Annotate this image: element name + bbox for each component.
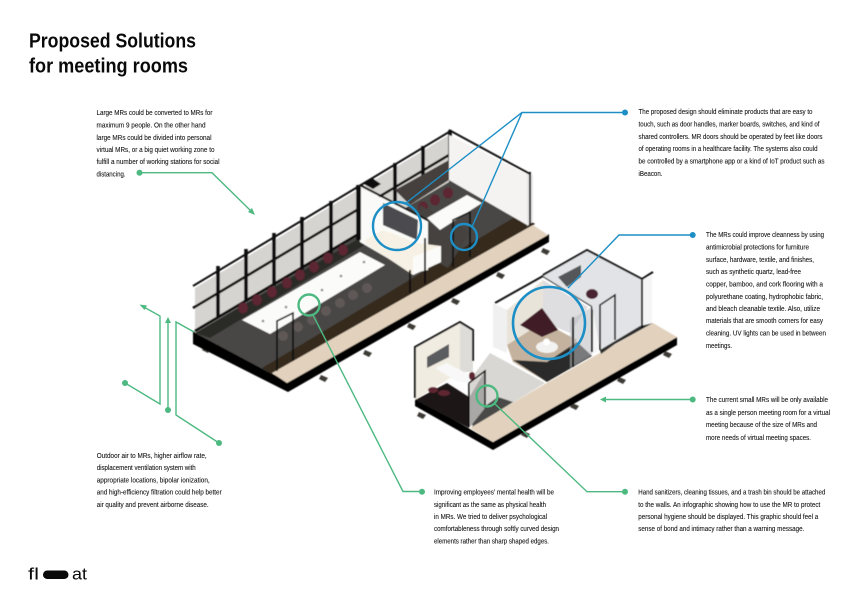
callout: touchless products text: touch, such as door handles, marker boards, switches, and kind of xyxy=(638,122,820,128)
callout: touchless products text: be controlled by a smartphone app or a kind of IoT product such as xyxy=(638,159,825,166)
logo: float: fl xyxy=(28,564,39,584)
callout leader: hygiene xyxy=(476,386,628,495)
title xyxy=(29,30,196,78)
callout: large rooms conversion text: fulfill a number of working stations for social xyxy=(96,159,220,166)
callout: air quality text: and high-efficiency filtration could help better xyxy=(97,490,222,496)
callout: air quality text: air quality and prevent airborne disease. xyxy=(97,502,209,509)
callout: large rooms conversion text: Large MRs could be converted to MRs for xyxy=(96,110,213,117)
callout: single person rooms text: more needs of virtual meeting spaces. xyxy=(706,435,811,442)
callout: cleanness text: copper, bamboo, and cork flooring with a xyxy=(706,282,823,288)
callout: touchless products text: iBeacon. xyxy=(638,171,663,178)
callout: cleanness text xyxy=(706,232,826,350)
callout leader: touchless products xyxy=(373,110,628,250)
left room xyxy=(415,322,460,400)
callout: large rooms conversion text: distancing. xyxy=(96,171,126,178)
callout: touchless products text xyxy=(638,109,825,178)
callout: cleanness text: The MRs could improve cleanness by using xyxy=(706,232,824,239)
callout: single person rooms text: meeting because of the size of MRs and xyxy=(706,422,817,429)
callout: air quality text: Outdoor air to MRs, higher airflow rate, xyxy=(97,453,207,460)
callout: cleanness text: materials that are smooth corners for easy xyxy=(706,318,823,325)
callout: air quality text xyxy=(97,453,222,509)
callout: mental health text xyxy=(434,490,559,546)
callout: touchless products text: of operating rooms in a healthcare facility. The systems also could xyxy=(638,146,818,153)
logo: float xyxy=(28,564,87,584)
callout: cleanness text: meetings. xyxy=(706,343,732,350)
callout: hygiene text xyxy=(638,490,825,533)
callout: cleanness text: antimicrobial protections for furniture xyxy=(706,244,809,252)
title: for meeting rooms xyxy=(29,56,188,78)
callout leader: mental health xyxy=(298,294,425,495)
callout: mental health text: comfortableness through softly curved design xyxy=(434,526,559,533)
callout: large rooms conversion text: virtual MRs, or a big quiet working zone to xyxy=(96,147,215,154)
callout: single person rooms text xyxy=(706,397,830,442)
callout: large rooms conversion text xyxy=(96,110,220,178)
callout: touchless products text: shared controllers. MR doors should be operated by feet like doors xyxy=(638,134,823,141)
callout: mental health text: elements rather than sharp shaped edges. xyxy=(434,538,549,546)
callout leader: cleanness xyxy=(513,232,696,359)
logo: float: at xyxy=(72,564,87,584)
callout: cleanness text: such as synthetic quartz, lead-free xyxy=(706,269,801,276)
arrows: ventilation airflow xyxy=(122,304,222,446)
callout: mental health text: significant as the same as physical health xyxy=(434,502,546,509)
callout: touchless products text: The proposed design should eliminate products that are easy to xyxy=(638,109,813,116)
illustration: small meeting rooms floor xyxy=(415,250,677,450)
callout: cleanness text: polyurethane coating, hydrophobic fabric, xyxy=(706,294,823,301)
right room xyxy=(543,250,642,350)
callout: large rooms conversion text: maximum 9 people. On the other hand xyxy=(96,122,206,130)
callout: mental health text: Improving employees’ mental health will be xyxy=(434,490,554,496)
callout: mental health text: in MRs. We tried to deliver psychological xyxy=(434,514,547,521)
callout: hygiene text: Hand sanitizers, cleaning tissues, and a trash bin should be attached xyxy=(638,490,825,496)
arrow: large rooms leader xyxy=(136,170,255,215)
callout: hygiene text: to the walls. An infographic showing how to use the MR to protect xyxy=(638,502,820,509)
callout: air quality text: appropriate locations, bipolar ionization, xyxy=(97,478,210,484)
callout: cleanness text: and bleach cleanable textile. Also, utilize xyxy=(706,306,820,313)
arrow: single person rooms leader xyxy=(600,396,696,402)
title: Proposed Solutions xyxy=(29,30,196,52)
callout: large rooms conversion text: large MRs could be divided into personal xyxy=(96,135,212,142)
callout: cleanness text: surface, hardware, textile, and finishes, xyxy=(706,257,814,264)
middle room xyxy=(493,303,507,353)
illustration: large meeting room floor xyxy=(193,130,550,392)
callout: single person rooms text: The current small MRs will be only available xyxy=(706,397,828,404)
callout: cleanness text: cleaning. UV lights can be used in between xyxy=(706,330,826,338)
callout: hygiene text: personal hygiene should be displayed. This graphic should feel a xyxy=(638,514,818,521)
callout: hygiene text: sense of bond and intimacy rather than a warning message. xyxy=(638,526,804,533)
callout: air quality text: displacement ventilation system with xyxy=(97,465,196,472)
callout: single person rooms text: as a single person meeting room for a virtual xyxy=(706,410,830,417)
